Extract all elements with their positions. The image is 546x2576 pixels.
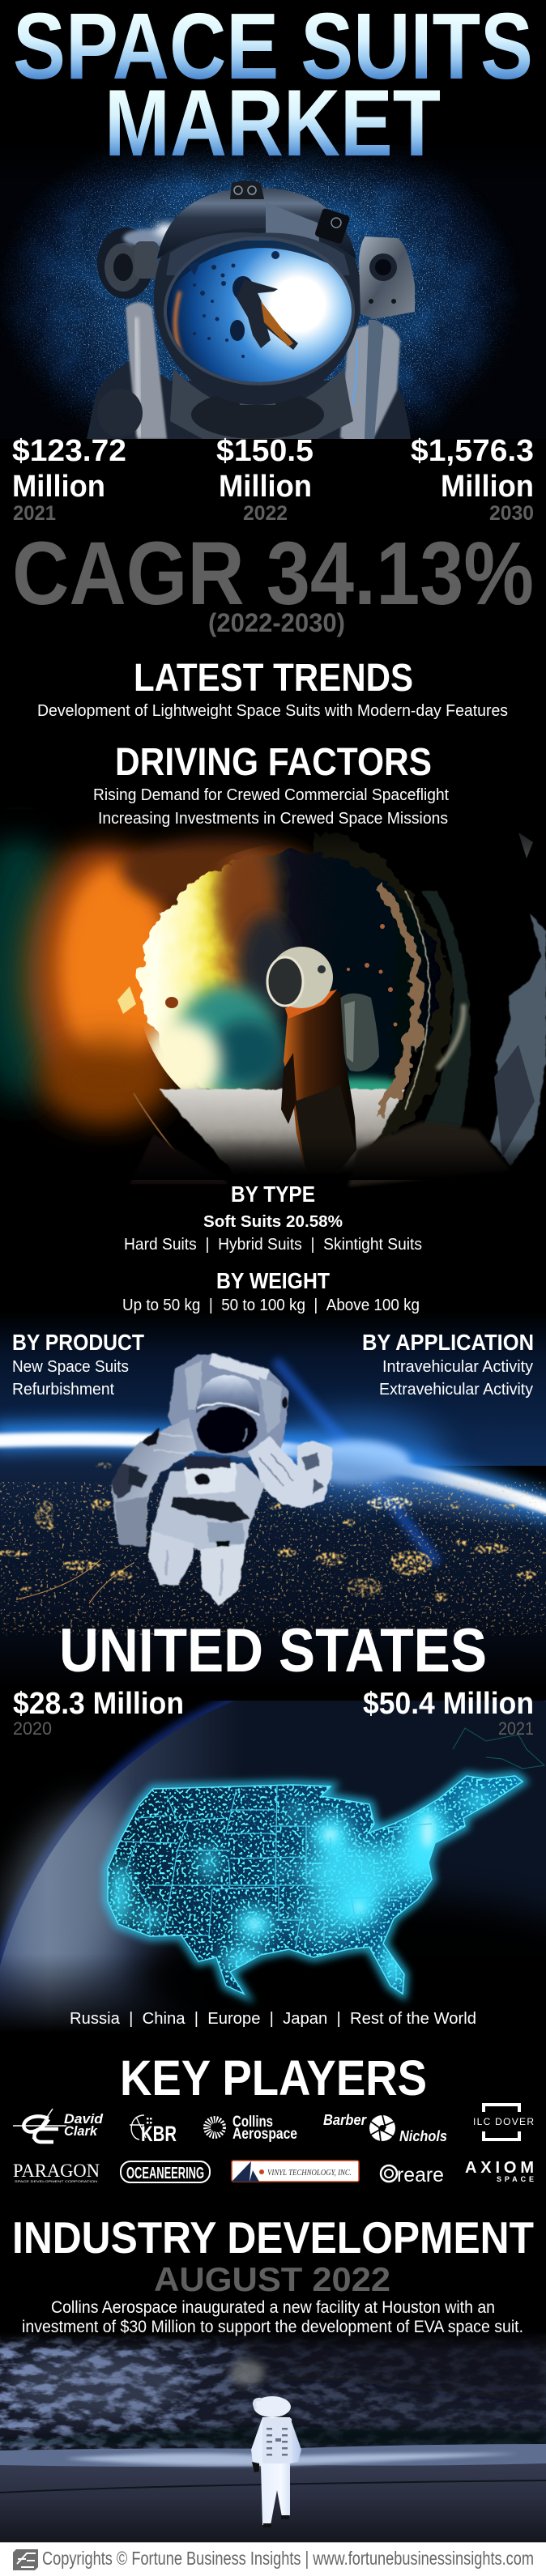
logo: David Clark: Clark	[64, 2123, 98, 2139]
industry development text: investment of $30 Million to support the development of EVA space suit.	[22, 2318, 523, 2336]
US market size 2020: $28.3 Million	[13, 1687, 184, 1721]
by product segment: New Space Suits	[12, 1358, 129, 1376]
logo: Collins Aerospace: Aerospace	[232, 2126, 297, 2143]
market size 2021	[12, 434, 126, 525]
logo: David Clark	[13, 2109, 104, 2142]
market size 2030: Million	[441, 470, 534, 504]
latest trends	[37, 657, 508, 720]
heading: industry development: AUGUST 2022	[154, 2260, 390, 2298]
title: Space Suits Market	[13, 0, 533, 176]
icon: astronaut from behind	[251, 2396, 301, 2527]
market size 2022: 2022	[243, 502, 288, 525]
US market size 2021: $50.4 Million	[363, 1687, 534, 1721]
by type segment	[124, 1182, 422, 1254]
by application segment: Extravehicular Activity	[379, 1381, 533, 1399]
logo: Collins Aerospace: Collins	[232, 2114, 273, 2131]
industry development text: Collins Aerospace inaugurated a new facility at Houston with an	[51, 2298, 495, 2317]
market size 2021: 2021	[13, 502, 56, 525]
image: astronaut over night earth	[0, 1312, 546, 1684]
logo: Oceaneering: OCEANEERING	[126, 2165, 204, 2182]
US market size 2021: 2021	[498, 1718, 534, 1739]
image: astronaut on rocky terrain	[0, 2332, 546, 2542]
US market size 2020	[13, 1687, 184, 1739]
logo: Barber Nichols	[323, 2112, 447, 2144]
by application segment: Intravehicular Activity	[382, 1358, 533, 1376]
by weight segment: Up to 50 kg | 50 to 100 kg | Above 100 kg	[122, 1297, 420, 1314]
market size 2030	[411, 434, 534, 525]
logo: Collins Aerospace	[207, 2114, 297, 2143]
industry development text	[22, 2298, 523, 2336]
logo: ILC Dover: ILC DOVER	[473, 2116, 534, 2127]
by application segment: BY APPLICATION	[362, 1330, 534, 1355]
market size 2021: $123.72	[12, 434, 126, 468]
icon: Fortune Business Insights logo	[13, 2549, 38, 2570]
by product segment	[12, 1330, 144, 1399]
image: glowing United States map on earth	[0, 1616, 546, 2028]
other regions: Russia | China | Europe | Japan | Rest of the World	[70, 2010, 476, 2028]
icon: portal astronaut	[267, 947, 379, 1174]
by product segment: BY PRODUCT	[12, 1330, 144, 1355]
heading: key players: KEY PLAYERS	[120, 2050, 427, 2106]
market size 2022: Million	[219, 470, 312, 504]
driving factors: DRIVING FACTORS	[115, 741, 432, 784]
title: Space Suits Market: MARKET	[105, 70, 441, 176]
US market size 2021	[363, 1687, 534, 1739]
by weight segment: BY WEIGHT	[216, 1268, 330, 1293]
logo: Axiom Space: AXIOM	[465, 2159, 534, 2177]
logo: Paragon: PARAGON	[13, 2161, 100, 2181]
icon: floating astronaut	[111, 1354, 332, 1606]
driving factors: Rising Demand for Crewed Commercial Spaceflight	[93, 786, 449, 804]
logo: Vinyl Technology: VINYL TECHNOLOGY, INC.	[267, 2168, 352, 2178]
footer bar	[0, 2542, 546, 2576]
logo: Barber Nichols: Barber	[323, 2112, 367, 2128]
logo: Vinyl Technology	[232, 2161, 359, 2182]
heading: industry development	[12, 2212, 534, 2298]
market size 2022: $150.5	[216, 434, 314, 468]
by application segment	[362, 1330, 534, 1399]
driving factors: Increasing Investments in Crewed Space Missions	[98, 810, 448, 828]
logo: David Clark: David	[64, 2111, 104, 2127]
latest trends: LATEST TRENDS	[134, 657, 413, 700]
market size 2030: $1,576.3	[411, 434, 534, 468]
logo: ILC Dover	[473, 2105, 534, 2140]
logo: Paragon: SPACE DEVELOPMENT CORPORATION	[15, 2179, 97, 2183]
logo: KBR: KBR	[141, 2122, 177, 2146]
CAGR figure: (2022-2030)	[208, 608, 345, 637]
by type segment: BY TYPE	[231, 1182, 315, 1207]
logo: KBR	[130, 2115, 177, 2146]
panel: key player logos	[13, 2105, 534, 2186]
market size 2030: 2030	[489, 502, 534, 525]
image: astronaut helmet in nebula	[0, 144, 524, 439]
latest trends: Development of Lightweight Space Suits with Modern-day Features	[37, 702, 508, 720]
image: astronaut at torn portal	[0, 810, 546, 1186]
by product segment: Refurbishment	[12, 1381, 114, 1399]
logo: Creare: reare	[397, 2164, 444, 2186]
logo: Barber Nichols: Nichols	[399, 2128, 447, 2144]
logo: Axiom Space: SPACE	[497, 2175, 534, 2183]
US market size 2020: 2020	[13, 1718, 52, 1739]
market size 2022	[216, 434, 314, 525]
driving factors	[93, 741, 449, 828]
icon: small floating astronaut reflection	[232, 276, 298, 350]
logo: Oceaneering	[121, 2161, 210, 2182]
by type segment: Hard Suits | Hybrid Suits | Skintight Suits	[124, 1236, 422, 1254]
heading: United States: UNITED STATES	[59, 1616, 487, 1685]
by type segment: Soft Suits 20.58%	[203, 1212, 343, 1231]
by weight segment	[122, 1268, 420, 1314]
market size 2021: Million	[12, 470, 105, 504]
